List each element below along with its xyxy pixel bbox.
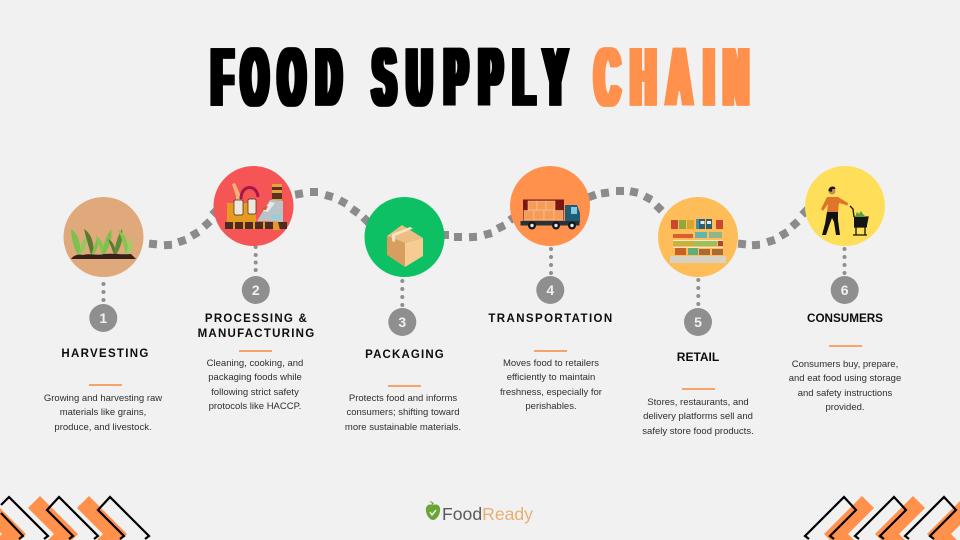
description 4 [500,358,602,412]
dashed connector: transportation to retail [587,187,665,214]
heading: packaging: PACKAGING [365,349,445,361]
number badge 5: 5 [694,314,702,330]
number badge 1 [89,304,117,332]
title: SUPPLY [373,32,566,123]
divider 1 [89,384,122,386]
decorative chevrons right [805,496,960,540]
title: FOOD [212,32,340,123]
icon: retail shelves [658,197,738,277]
description 6: provided. [825,402,865,413]
divider 5 [682,388,715,390]
icon: packaging box [364,197,444,277]
heading: processing and manufacturing: MANUFACTURING [198,328,315,340]
step 2: processing text [198,313,315,412]
heading: processing and manufacturing [198,313,315,340]
step 1: harvesting text [44,348,162,433]
divider 3 [388,385,421,387]
number badge 6 [831,276,859,304]
heading: harvesting: HARVESTING [61,348,150,360]
icon: harvesting seedlings [64,197,144,277]
icon: processing machinery [214,166,294,246]
decorative chevrons left [0,496,149,540]
description 2: protocols like HACCP. [209,401,301,412]
description 6: Consumers buy, prepare, [792,359,898,370]
number badge 2: 2 [252,282,260,298]
description 5: Stores, restaurants, and [647,397,749,408]
description 3: Protects food and informs [349,393,457,404]
step 3: packaging text [345,349,461,433]
description 3 [345,393,461,433]
description 2: Cleaning, cooking, and [207,358,303,369]
number badge 1: 1 [99,310,107,326]
divider 2 [239,350,272,352]
heading: retail: RETAIL [677,350,719,364]
description 5 [642,397,754,437]
number badge 2 [242,276,270,304]
description 1: materials like grains, [60,407,146,418]
logo: FoodReady: FoodReady [442,504,533,524]
icon: shopper with cart [805,166,885,246]
description 2 [207,358,303,412]
number badge 3: 3 [398,314,406,330]
dashed connector: processing to packaging [294,188,372,226]
title [212,32,748,123]
heading: consumers: CONSUMERS [807,312,883,325]
description 1 [44,393,162,433]
description 6 [789,359,901,413]
number badge 4: 4 [546,282,554,298]
description 1: Growing and harvesting raw [44,393,162,404]
icon: delivery truck [510,166,590,246]
divider 6 [829,345,862,347]
step 4: transportation text [488,313,614,412]
number badge 5 [684,308,712,336]
heading: processing and manufacturing: PROCESSING & [205,313,308,325]
dashed connector: packaging to transportation [441,212,519,241]
number badge 4 [536,276,564,304]
description 5: delivery platforms sell and [643,411,753,422]
step 5: retail text [642,350,754,437]
description 6: and safety instructions [798,388,892,399]
dashed connector: retail to consumers [738,206,811,249]
description 6: and eat food using storage [789,373,901,384]
description 1: produce, and livestock. [54,422,152,433]
description 5: safely store food products. [642,426,754,437]
dashed connector: harvesting to processing [149,206,221,249]
title: CHAIN [595,32,748,123]
divider 4 [534,350,567,352]
description 4: Moves food to retailers [503,358,599,369]
number badge 6: 6 [841,282,849,298]
description 4: freshness, especially for [500,387,602,398]
description 3: consumers; shifting toward [346,407,459,418]
description 3: more sustainable materials. [345,422,461,433]
description 4: perishables. [525,401,577,412]
description 2: following strict safety [211,387,299,398]
description 4: efficiently to maintain [507,372,595,383]
step 6: consumers text [789,312,901,413]
number badge 3 [388,308,416,336]
heading: transportation: TRANSPORTATION [488,313,614,325]
dotted stems to number badges [102,245,846,307]
description 2: packaging foods while [208,372,302,383]
